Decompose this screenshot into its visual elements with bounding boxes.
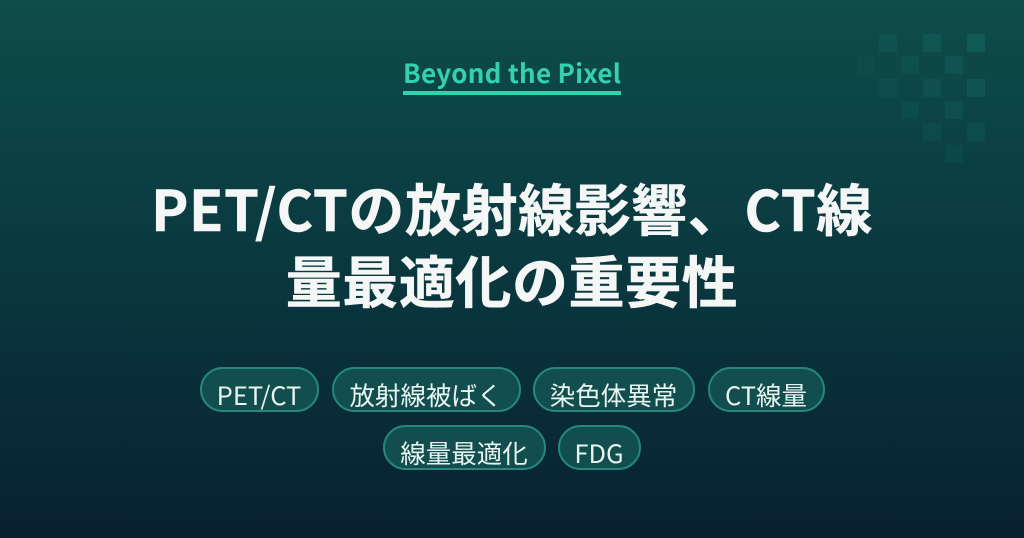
tag: 染色体異常 bbox=[533, 367, 695, 412]
tag: 線量最適化 bbox=[383, 425, 546, 470]
tag: FDG: FDG bbox=[574, 434, 624, 471]
decorative pixel grid icon bbox=[879, 34, 985, 141]
tag: FDG bbox=[558, 425, 641, 470]
tag: 放射線被ばく: 放射線被ばく bbox=[349, 376, 502, 413]
tag: CT線量 bbox=[708, 367, 825, 412]
tag: PET/CT bbox=[200, 367, 319, 412]
tag: PET/CT: PET/CT bbox=[217, 376, 301, 413]
tag: 染色体異常: 染色体異常 bbox=[550, 376, 677, 413]
tag: 線量最適化: 線量最適化 bbox=[400, 434, 528, 471]
tag: CT線量: CT線量 bbox=[725, 376, 807, 413]
title: PET/CTの放射線影響、CT線 bbox=[151, 167, 873, 248]
tags bbox=[200, 367, 825, 471]
title: 量最適化の重要性 bbox=[286, 239, 738, 320]
tag: 放射線被ばく bbox=[332, 367, 521, 412]
title bbox=[151, 167, 873, 320]
brand label: Beyond the Pixel: Beyond the Pixel bbox=[403, 54, 621, 91]
